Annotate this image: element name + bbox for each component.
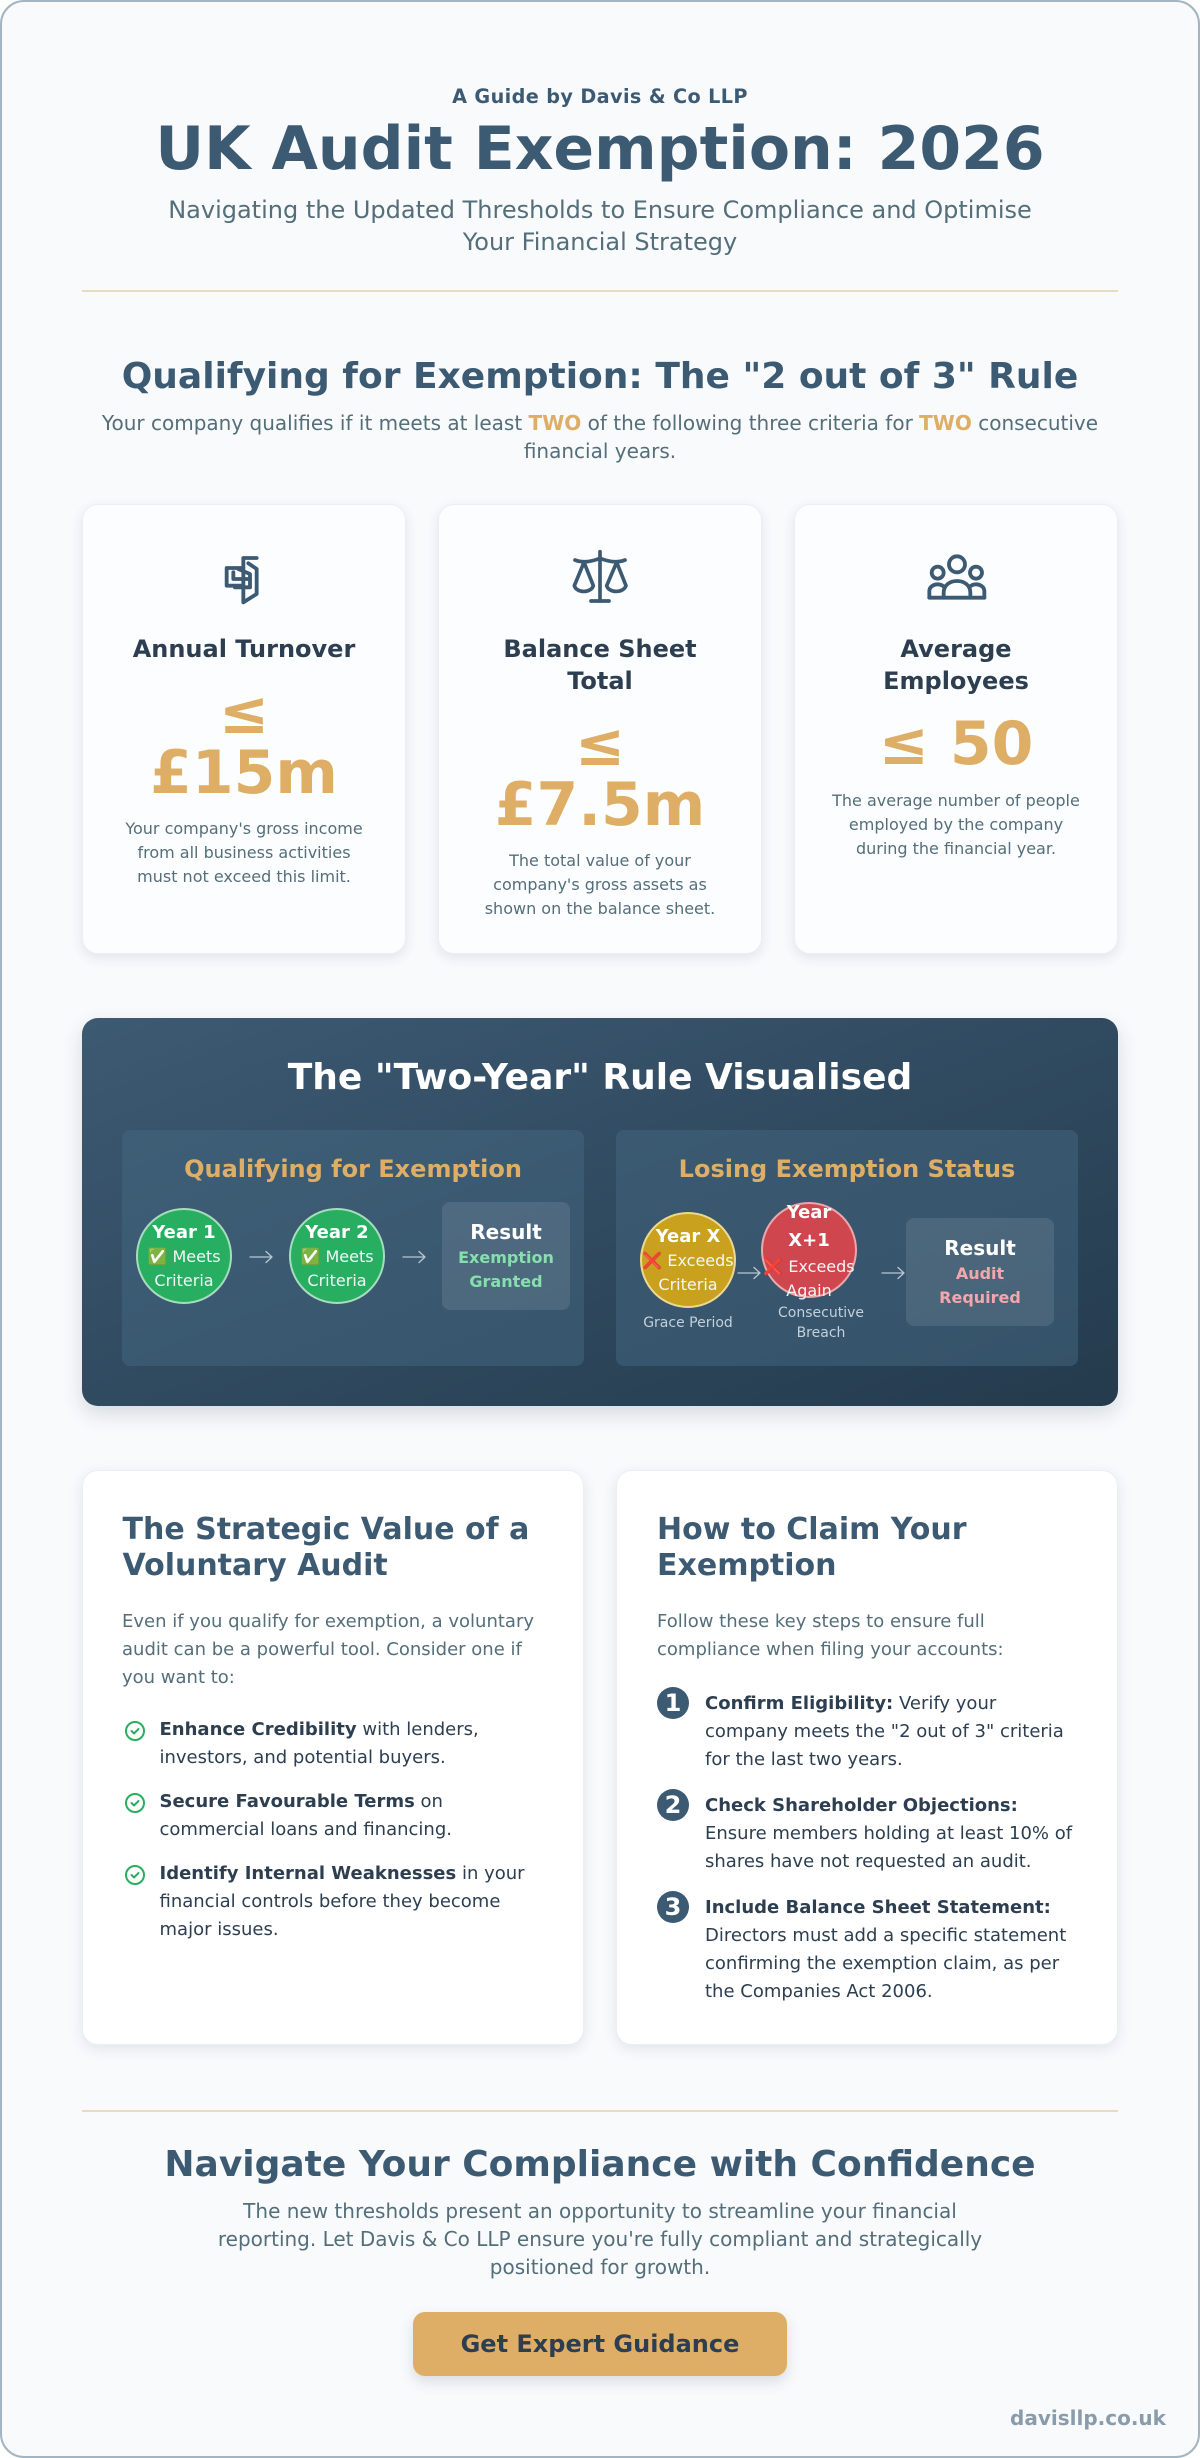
year x+1 text: Year bbox=[787, 1202, 831, 1222]
subtitle: Navigating the Updated Thresholds to Ensure Compliance and Optimise bbox=[168, 196, 1032, 224]
sub-panel: losing exemption status bbox=[616, 1130, 1078, 1366]
title: UK Audit Exemption: 2026 bbox=[155, 114, 1045, 184]
description: employed by the company bbox=[849, 815, 1063, 834]
step 2 text: shares have not requested an audit. bbox=[705, 1851, 1032, 1872]
step number 1: 1 bbox=[665, 1689, 681, 1717]
list item: internal weaknesses: financial controls before they become bbox=[160, 1891, 500, 1912]
value: ≤ bbox=[219, 678, 269, 748]
description: shown on the balance sheet. bbox=[485, 899, 715, 918]
call to action button: Get Expert Guidance bbox=[461, 2330, 739, 2358]
step number 1 bbox=[657, 1687, 689, 1719]
footer paragraph bbox=[218, 2199, 982, 2279]
list item: favourable terms: commercial loans and financing. bbox=[160, 1819, 452, 1840]
description bbox=[485, 851, 715, 918]
section intro: financial years. bbox=[524, 439, 676, 463]
icon: people bbox=[927, 554, 986, 600]
eyebrow: guide by line: A Guide by Davis & Co LLP bbox=[452, 85, 748, 108]
label: grace period: Grace Period bbox=[643, 1315, 733, 1331]
sub-panel: qualifying for exemption bbox=[122, 1130, 584, 1366]
panel: strategic value of a voluntary audit bbox=[82, 1470, 584, 2045]
label: consecutive breach: Breach bbox=[797, 1325, 845, 1341]
sub-panel heading: qualifying: Qualifying for Exemption bbox=[184, 1155, 522, 1183]
icon: check bbox=[125, 1793, 145, 1813]
intro: strategic value: audit can be a powerful tool. Consider one if bbox=[122, 1639, 522, 1660]
year x+1 text: Again bbox=[786, 1280, 832, 1300]
result text: Result bbox=[470, 1220, 542, 1244]
panel: annual turnover bbox=[82, 504, 406, 954]
card heading: Total bbox=[567, 667, 633, 695]
value: £7.5m bbox=[495, 770, 705, 840]
year x text bbox=[642, 1226, 734, 1294]
panel: balance sheet total bbox=[438, 504, 762, 954]
description: during the financial year. bbox=[856, 839, 1056, 858]
step 2 text: Ensure members holding at least 10% of bbox=[705, 1823, 1072, 1844]
value bbox=[150, 678, 338, 808]
result text bbox=[458, 1220, 554, 1291]
heading: how to claim bbox=[657, 1512, 967, 1583]
card heading: Employees bbox=[883, 667, 1029, 695]
description bbox=[125, 819, 363, 886]
circle: year 1 bbox=[136, 1208, 232, 1304]
circle: year 2 bbox=[289, 1208, 385, 1304]
footer paragraph: reporting. Let Davis & Co LLP ensure you're fully compliant and strategically bbox=[218, 2227, 982, 2251]
section heading: Qualifying for Exemption: The "2 out of 3" Rule bbox=[122, 356, 1078, 397]
year x text: Criteria bbox=[658, 1275, 718, 1294]
arrow bbox=[402, 1250, 426, 1264]
heading: strategic value: The Strategic Value of a bbox=[122, 1512, 529, 1547]
step 3 text: confirming the exemption claim, as per bbox=[705, 1953, 1059, 1974]
year 1 text: Criteria bbox=[154, 1271, 214, 1290]
heading: strategic value: Voluntary Audit bbox=[122, 1548, 388, 1583]
intro: how to claim: Follow these key steps to ensure full bbox=[657, 1611, 985, 1632]
footer paragraph: positioned for growth. bbox=[490, 2255, 710, 2279]
section: 2 out of 3 rule heading bbox=[102, 356, 1098, 463]
subtitle: Your Financial Strategy bbox=[463, 228, 737, 256]
list item: internal weaknesses: major issues. bbox=[160, 1919, 279, 1940]
result text: Audit bbox=[956, 1264, 1004, 1283]
arrow bbox=[249, 1250, 273, 1264]
subtitle bbox=[168, 196, 1032, 256]
sub-panel heading: losing: Losing Exemption Status bbox=[679, 1155, 1015, 1183]
step 3 text: the Companies Act 2006. bbox=[705, 1981, 933, 2002]
heading: how to claim: Exemption bbox=[657, 1548, 837, 1583]
section intro: Your company qualifies if it meets at least TWO of the following three criteria for TWO consecutive bbox=[102, 411, 1098, 435]
step number 2 bbox=[657, 1789, 689, 1821]
icon: check bbox=[125, 1721, 145, 1741]
step 3 text bbox=[705, 1897, 1066, 2002]
heading: how to claim: How to Claim Your bbox=[657, 1512, 967, 1547]
website: davisllp.co.uk bbox=[1010, 2406, 1166, 2430]
result text bbox=[939, 1236, 1021, 1307]
list item: favourable terms bbox=[125, 1791, 452, 1840]
step number 3: 3 bbox=[665, 1893, 681, 1921]
card heading bbox=[883, 635, 1029, 695]
description: company's gross assets as bbox=[493, 875, 707, 894]
label: consecutive breach bbox=[778, 1305, 864, 1341]
year x+1 text: ❌ Exceeds bbox=[763, 1256, 855, 1276]
year 2 text bbox=[300, 1222, 374, 1290]
circle: year x bbox=[640, 1212, 736, 1308]
step 3 text: Directors must add a specific statement bbox=[705, 1925, 1066, 1946]
card heading: Annual Turnover bbox=[133, 635, 355, 663]
step 2 text: Check Shareholder Objections: bbox=[705, 1795, 1018, 1816]
step 1 text: company meets the "2 out of 3" criteria bbox=[705, 1721, 1064, 1742]
step number 3 bbox=[657, 1891, 689, 1923]
description: from all business activities bbox=[137, 843, 351, 862]
year x text: Year X bbox=[656, 1226, 720, 1247]
arrow bbox=[737, 1266, 761, 1280]
icon: scales bbox=[572, 550, 628, 603]
list item: internal weaknesses: Identify Internal Weaknesses in your bbox=[160, 1863, 525, 1884]
intro: strategic value: Even if you qualify for exemption, a voluntary bbox=[122, 1611, 534, 1632]
value: ≤ 50 bbox=[879, 709, 1033, 779]
footer paragraph: The new thresholds present an opportunity to streamline your financial bbox=[243, 2199, 957, 2223]
year x text: ❌ Exceeds bbox=[642, 1251, 734, 1270]
description bbox=[832, 791, 1080, 858]
year 1 text: ✅ Meets bbox=[147, 1247, 221, 1266]
card heading: Average bbox=[900, 635, 1012, 663]
result text: Exemption bbox=[458, 1248, 554, 1267]
result: audit required bbox=[906, 1218, 1054, 1326]
circle: year x+1 bbox=[761, 1202, 857, 1298]
intro: how to claim: compliance when filing your accounts: bbox=[657, 1639, 1004, 1660]
result: exemption granted bbox=[442, 1202, 570, 1310]
arrow bbox=[881, 1266, 905, 1280]
section intro bbox=[102, 411, 1098, 463]
year x+1 text bbox=[763, 1202, 855, 1300]
dark panel title: The "Two-Year" Rule Visualised bbox=[288, 1057, 912, 1098]
intro: how to claim bbox=[657, 1611, 1004, 1660]
intro: strategic value: you want to: bbox=[122, 1667, 235, 1688]
value: ≤ bbox=[575, 710, 625, 780]
description: Your company's gross income bbox=[125, 819, 363, 838]
panel: two-year rule visualised bbox=[82, 1018, 1118, 1406]
list item: enhance credibility: Enhance Credibility with lenders, bbox=[160, 1719, 479, 1740]
call to action button bbox=[413, 2312, 787, 2376]
footer heading: Navigate Your Compliance with Confidence bbox=[164, 2144, 1036, 2185]
step 1 text: Confirm Eligibility: Verify your bbox=[705, 1693, 996, 1714]
year 1 text bbox=[147, 1222, 221, 1290]
header block bbox=[155, 85, 1045, 256]
heading: strategic value bbox=[122, 1512, 529, 1583]
list item: internal weaknesses bbox=[125, 1863, 525, 1940]
result text: Result bbox=[944, 1236, 1016, 1260]
list item: favourable terms: Secure Favourable Terms on bbox=[160, 1791, 443, 1812]
value: £15m bbox=[150, 738, 338, 808]
panel: how to claim your exemption bbox=[616, 1470, 1118, 2045]
label: consecutive breach: Consecutive bbox=[778, 1305, 864, 1321]
year 1 text: Year 1 bbox=[152, 1222, 216, 1243]
description: must not exceed this limit. bbox=[137, 867, 351, 886]
result text: Required bbox=[939, 1288, 1021, 1307]
card heading bbox=[503, 635, 697, 695]
year 2 text: Criteria bbox=[307, 1271, 367, 1290]
result text: Granted bbox=[469, 1272, 543, 1291]
list item: enhance credibility: investors, and potential buyers. bbox=[160, 1747, 446, 1768]
step 2 text bbox=[705, 1795, 1072, 1872]
description: The average number of people bbox=[832, 791, 1080, 810]
list item: enhance credibility bbox=[125, 1719, 479, 1768]
panel: average employees bbox=[794, 504, 1118, 954]
step 1 text: for the last two years. bbox=[705, 1749, 903, 1770]
year 2 text: Year 2 bbox=[305, 1222, 369, 1243]
icon: turnover bbox=[224, 556, 259, 604]
step 1 text bbox=[705, 1693, 1064, 1770]
step number 2: 2 bbox=[665, 1791, 681, 1819]
description: The total value of your bbox=[509, 851, 691, 870]
icon: check bbox=[125, 1865, 145, 1885]
year x+1 text: X+1 bbox=[788, 1230, 830, 1250]
value bbox=[495, 710, 705, 840]
card heading: Balance Sheet bbox=[503, 635, 697, 663]
year 2 text: ✅ Meets bbox=[300, 1247, 374, 1266]
step 3 text: Include Balance Sheet Statement: bbox=[705, 1897, 1051, 1918]
intro: strategic value bbox=[122, 1611, 534, 1688]
